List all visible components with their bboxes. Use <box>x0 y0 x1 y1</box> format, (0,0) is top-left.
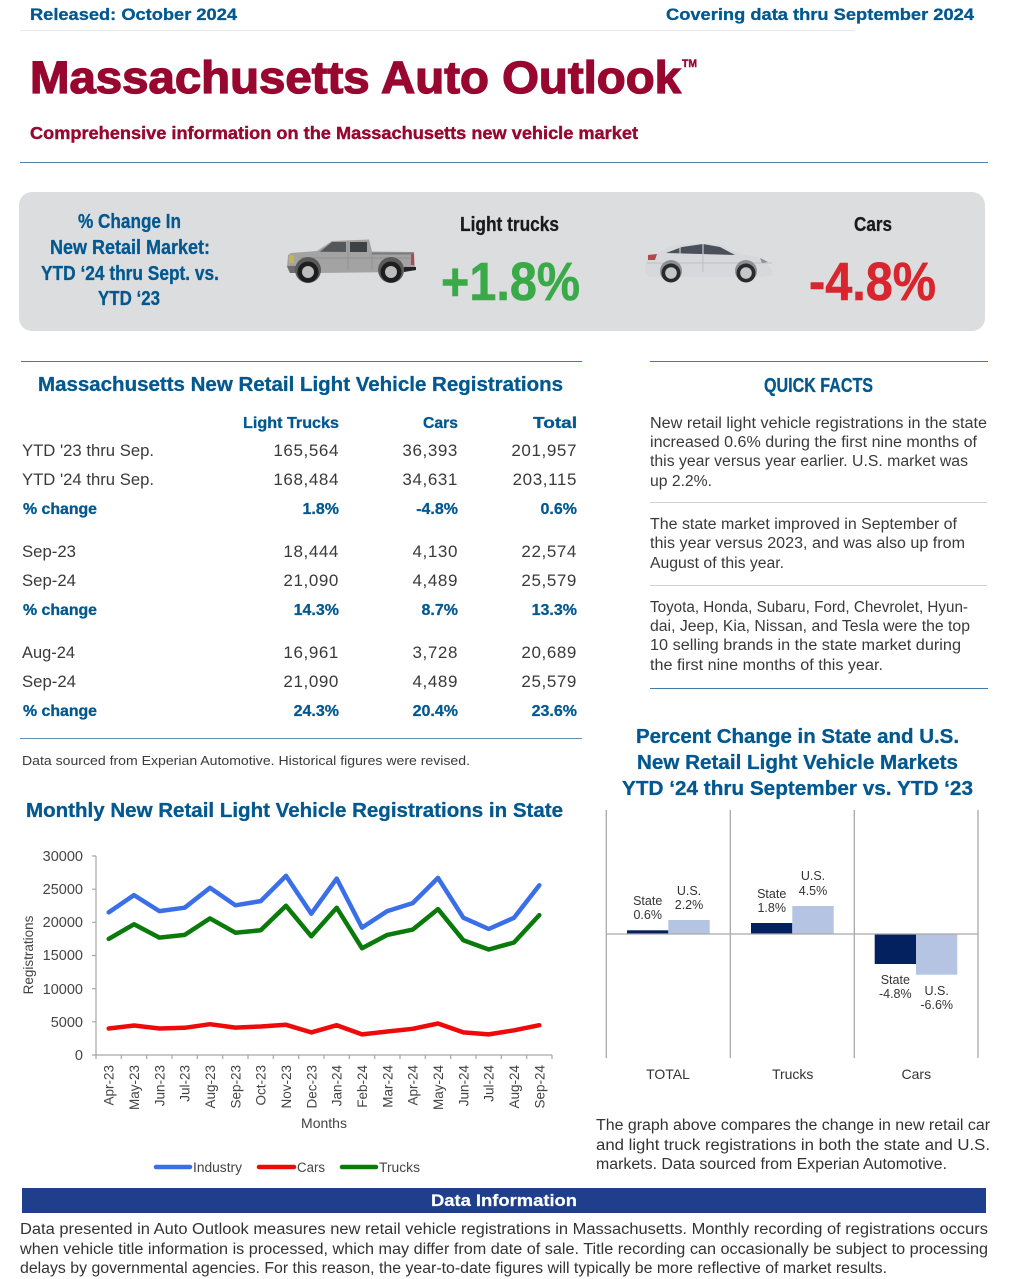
group: year over year month: 4,489 <box>412 571 458 590</box>
group: year over year month: 14.3% <box>294 602 339 619</box>
bars: cars <box>875 934 957 975</box>
group: year over year month: 25,579 <box>521 571 577 590</box>
series: industry <box>109 876 539 929</box>
x axis month labels: Dec-23 <box>304 1065 319 1109</box>
group: month over month: 4,489 <box>412 672 458 691</box>
group: month over month: 3,728 <box>412 643 458 662</box>
x axis title: Months <box>301 1115 347 1131</box>
x axis month labels: May-24 <box>431 1065 446 1110</box>
x axis month labels: Apr-23 <box>102 1065 117 1106</box>
bar chart heading: Percent Change in State and U.S. <box>636 725 959 748</box>
bar value labels: 0.6% <box>633 908 662 922</box>
bars: total <box>627 920 710 934</box>
chart legend <box>156 1160 420 1175</box>
fact 1: this year versus year earlier. U.S. market was <box>650 453 968 470</box>
bar category labels: Cars <box>902 1066 931 1082</box>
group: month over month: 24.3% <box>294 703 339 720</box>
bar category labels: Trucks <box>772 1066 813 1082</box>
panel: registrations table <box>20 362 582 768</box>
icon: sedan car <box>645 243 773 282</box>
group: month over month: 16,961 <box>283 643 339 662</box>
group: year to date <box>22 441 577 518</box>
fact 1: up 2.2%. <box>650 473 712 490</box>
y axis labels: 25000 <box>43 882 83 898</box>
bar value labels <box>633 869 953 1012</box>
panel heading: New Retail Market: <box>50 237 210 259</box>
title: TM <box>682 58 697 70</box>
data information band <box>22 1188 986 1213</box>
x axis month labels: Jun-24 <box>456 1065 471 1106</box>
column headers: Cars <box>423 415 458 432</box>
panel heading <box>41 211 219 310</box>
bar chart heading: YTD ‘24 thru September vs. YTD ‘23 <box>622 777 973 800</box>
group: year over year month: Sep-23 <box>22 543 76 561</box>
fact 3: the first nine months of this year. <box>650 657 883 674</box>
subtitle: Comprehensive information on the Massachusetts new vehicle market <box>30 123 638 143</box>
group: year to date: 165,564 <box>273 441 339 460</box>
y axis labels: 15000 <box>43 948 83 964</box>
group: year to date: 203,115 <box>513 470 577 489</box>
group: year to date: -4.8% <box>416 501 458 518</box>
bar value labels: State <box>757 887 786 901</box>
fact 2: this year versus 2023, and was also up from <box>650 535 965 552</box>
group: month over month: 20.4% <box>413 703 458 720</box>
bar value labels: U.S. <box>801 869 825 883</box>
y axis labels: 0 <box>75 1048 83 1064</box>
cars value: -4.8% <box>809 252 936 312</box>
bar chart heading: New Retail Light Vehicle Markets <box>637 751 958 774</box>
group: year over year month: 22,574 <box>521 542 577 561</box>
line chart heading: Monthly New Retail Light Vehicle Registrations in State <box>26 800 563 822</box>
bar value labels: 4.5% <box>799 884 827 898</box>
group: year to date: 36,393 <box>402 441 458 460</box>
table source note: Data sourced from Experian Automotive. Historical figures were revised. <box>22 753 470 768</box>
bar chart caption: The graph above compares the change in new retail car <box>596 1117 990 1134</box>
fact 3 <box>650 599 970 674</box>
bar chart caption: and light truck registrations in both the state and U.S. <box>596 1137 990 1154</box>
column headers: Light Trucks <box>243 415 339 432</box>
group: year to date: 0.6% <box>541 501 577 518</box>
bars: trucks <box>751 906 834 934</box>
y axis labels: 20000 <box>43 915 83 931</box>
data information text: when vehicle title information is processed, which may differ from date of sale. Title recording can occasionally be subject to processing <box>19 1241 988 1258</box>
group: year over year month: 8.7% <box>422 602 458 619</box>
group: year to date: 168,484 <box>273 470 339 489</box>
bar chart caption <box>596 1117 990 1173</box>
fact 3: Toyota, Honda, Subaru, Ford, Chevrolet, Hyun- <box>650 599 968 616</box>
bar value labels: U.S. <box>677 884 701 898</box>
group: month over month: 20,689 <box>521 643 577 662</box>
group: year to date: 201,957 <box>511 441 577 460</box>
group: year to date: YTD '23 thru Sep. <box>22 442 154 460</box>
fact 3: dai, Jeep, Kia, Nissan, and Tesla were the top <box>650 618 970 635</box>
bar category labels <box>646 1066 931 1082</box>
bar value labels: U.S. <box>925 984 949 998</box>
fact 1: increased 0.6% during the first nine months of <box>650 434 978 451</box>
bar chart heading <box>622 725 973 800</box>
chart legend: Cars <box>297 1160 325 1175</box>
y axis labels: 30000 <box>43 849 83 865</box>
group: year over year month: 21,090 <box>283 571 339 590</box>
bar value labels: State <box>633 894 662 908</box>
group: month over month: Sep-24 <box>22 673 76 691</box>
y axis labels <box>43 849 83 1064</box>
x axis month labels: Oct-23 <box>254 1065 269 1106</box>
cars label: Cars <box>854 214 892 236</box>
group: month over month: 23.6% <box>532 703 577 720</box>
fact 1: New retail light vehicle registrations in the state <box>650 415 987 432</box>
group: year over year month: 4,130 <box>412 542 458 561</box>
x axis month labels <box>102 1065 547 1110</box>
data information text: Data presented in Auto Outlook measures new retail vehicle registrations in Massachusetts. Monthly recording of registrations occurs <box>20 1221 988 1238</box>
bar chart: state vs U.S. percent change <box>606 810 978 1082</box>
fact 2: The state market improved in September of <box>650 516 958 533</box>
group: month over month: 21,090 <box>283 672 339 691</box>
x axis month labels: Feb-24 <box>355 1065 370 1108</box>
y axis labels: 10000 <box>43 982 83 998</box>
x axis month labels: Aug-23 <box>203 1065 218 1109</box>
chart legend: Trucks <box>379 1160 420 1175</box>
data information band: Data Information <box>431 1191 577 1210</box>
x axis month labels: Jan-24 <box>330 1065 345 1106</box>
group: year over year month: 13.3% <box>532 602 577 619</box>
x axis month labels: Sep-23 <box>228 1065 243 1109</box>
x axis month labels: Jul-24 <box>482 1065 497 1102</box>
group: year to date: 1.8% <box>303 501 339 518</box>
title: Massachusetts Auto Outlook <box>30 52 682 103</box>
icon: pickup truck <box>287 240 416 283</box>
group: month over month: 25,579 <box>521 672 577 691</box>
panel heading: YTD ‘23 <box>98 288 160 310</box>
x axis month labels: Jun-23 <box>152 1065 167 1106</box>
column headers <box>243 415 577 432</box>
data information text <box>19 1221 988 1277</box>
fact 1 <box>650 415 987 490</box>
series: trucks <box>109 906 539 950</box>
x axis month labels: Jul-23 <box>178 1065 193 1102</box>
panel heading: % Change In <box>78 211 181 233</box>
x axis month labels: Mar-24 <box>380 1065 395 1108</box>
group: year to date: YTD '24 thru Sep. <box>22 471 154 489</box>
bar value labels: -4.8% <box>879 987 912 1001</box>
series: cars <box>109 1024 539 1034</box>
line chart: monthly registrations <box>21 849 552 1175</box>
x axis month labels: Aug-24 <box>507 1065 522 1109</box>
x axis month labels: May-23 <box>127 1065 142 1110</box>
data information text: delays by governmental agencies. For this reason, the year-to-date figures will typically be more reflective of market results. <box>20 1260 887 1277</box>
column headers: Total <box>533 415 577 432</box>
group: year to date: 34,631 <box>402 470 458 489</box>
fact 2 <box>650 516 965 572</box>
table heading: Massachusetts New Retail Light Vehicle Registrations <box>38 374 563 396</box>
x axis month labels: Apr-24 <box>406 1065 421 1106</box>
x axis month labels: Sep-24 <box>532 1065 547 1109</box>
group: month over month: Aug-24 <box>22 644 75 662</box>
light trucks value: +1.8% <box>441 252 580 312</box>
bar value labels: 1.8% <box>757 901 786 915</box>
chart legend: Industry <box>193 1160 242 1175</box>
bar value labels: State <box>881 973 910 987</box>
light trucks label: Light trucks <box>460 214 559 236</box>
header: data coverage: Covering data thru September 2024 <box>666 5 975 24</box>
bar value labels: 2.2% <box>675 898 703 912</box>
fact 3: 10 selling brands in the state market during <box>650 637 961 654</box>
panel heading: YTD ‘24 thru Sept. vs. <box>41 263 219 285</box>
group: year over year month: 18,444 <box>283 542 339 561</box>
bar category labels: TOTAL <box>646 1066 690 1082</box>
fact 2: August of this year. <box>650 555 784 572</box>
group: year over year month: % change <box>23 602 97 619</box>
bar chart caption: markets. Data sourced from Experian Automotive. <box>596 1156 947 1173</box>
quick facts heading: QUICK FACTS <box>764 375 873 397</box>
group: month over month: % change <box>23 703 97 720</box>
group: year to date: % change <box>23 501 97 518</box>
header: release date: Released: October 2024 <box>30 5 238 24</box>
panel: quick facts <box>650 362 988 688</box>
panel: percent change summary <box>19 192 985 331</box>
y axis title: Registrations <box>21 915 36 994</box>
group: month over month <box>22 643 577 720</box>
x axis month labels: Nov-23 <box>279 1065 294 1109</box>
group: year over year month <box>22 542 577 619</box>
y axis labels: 5000 <box>51 1015 83 1031</box>
group: year over year month: Sep-24 <box>22 572 76 590</box>
bar value labels: -6.6% <box>920 998 953 1012</box>
